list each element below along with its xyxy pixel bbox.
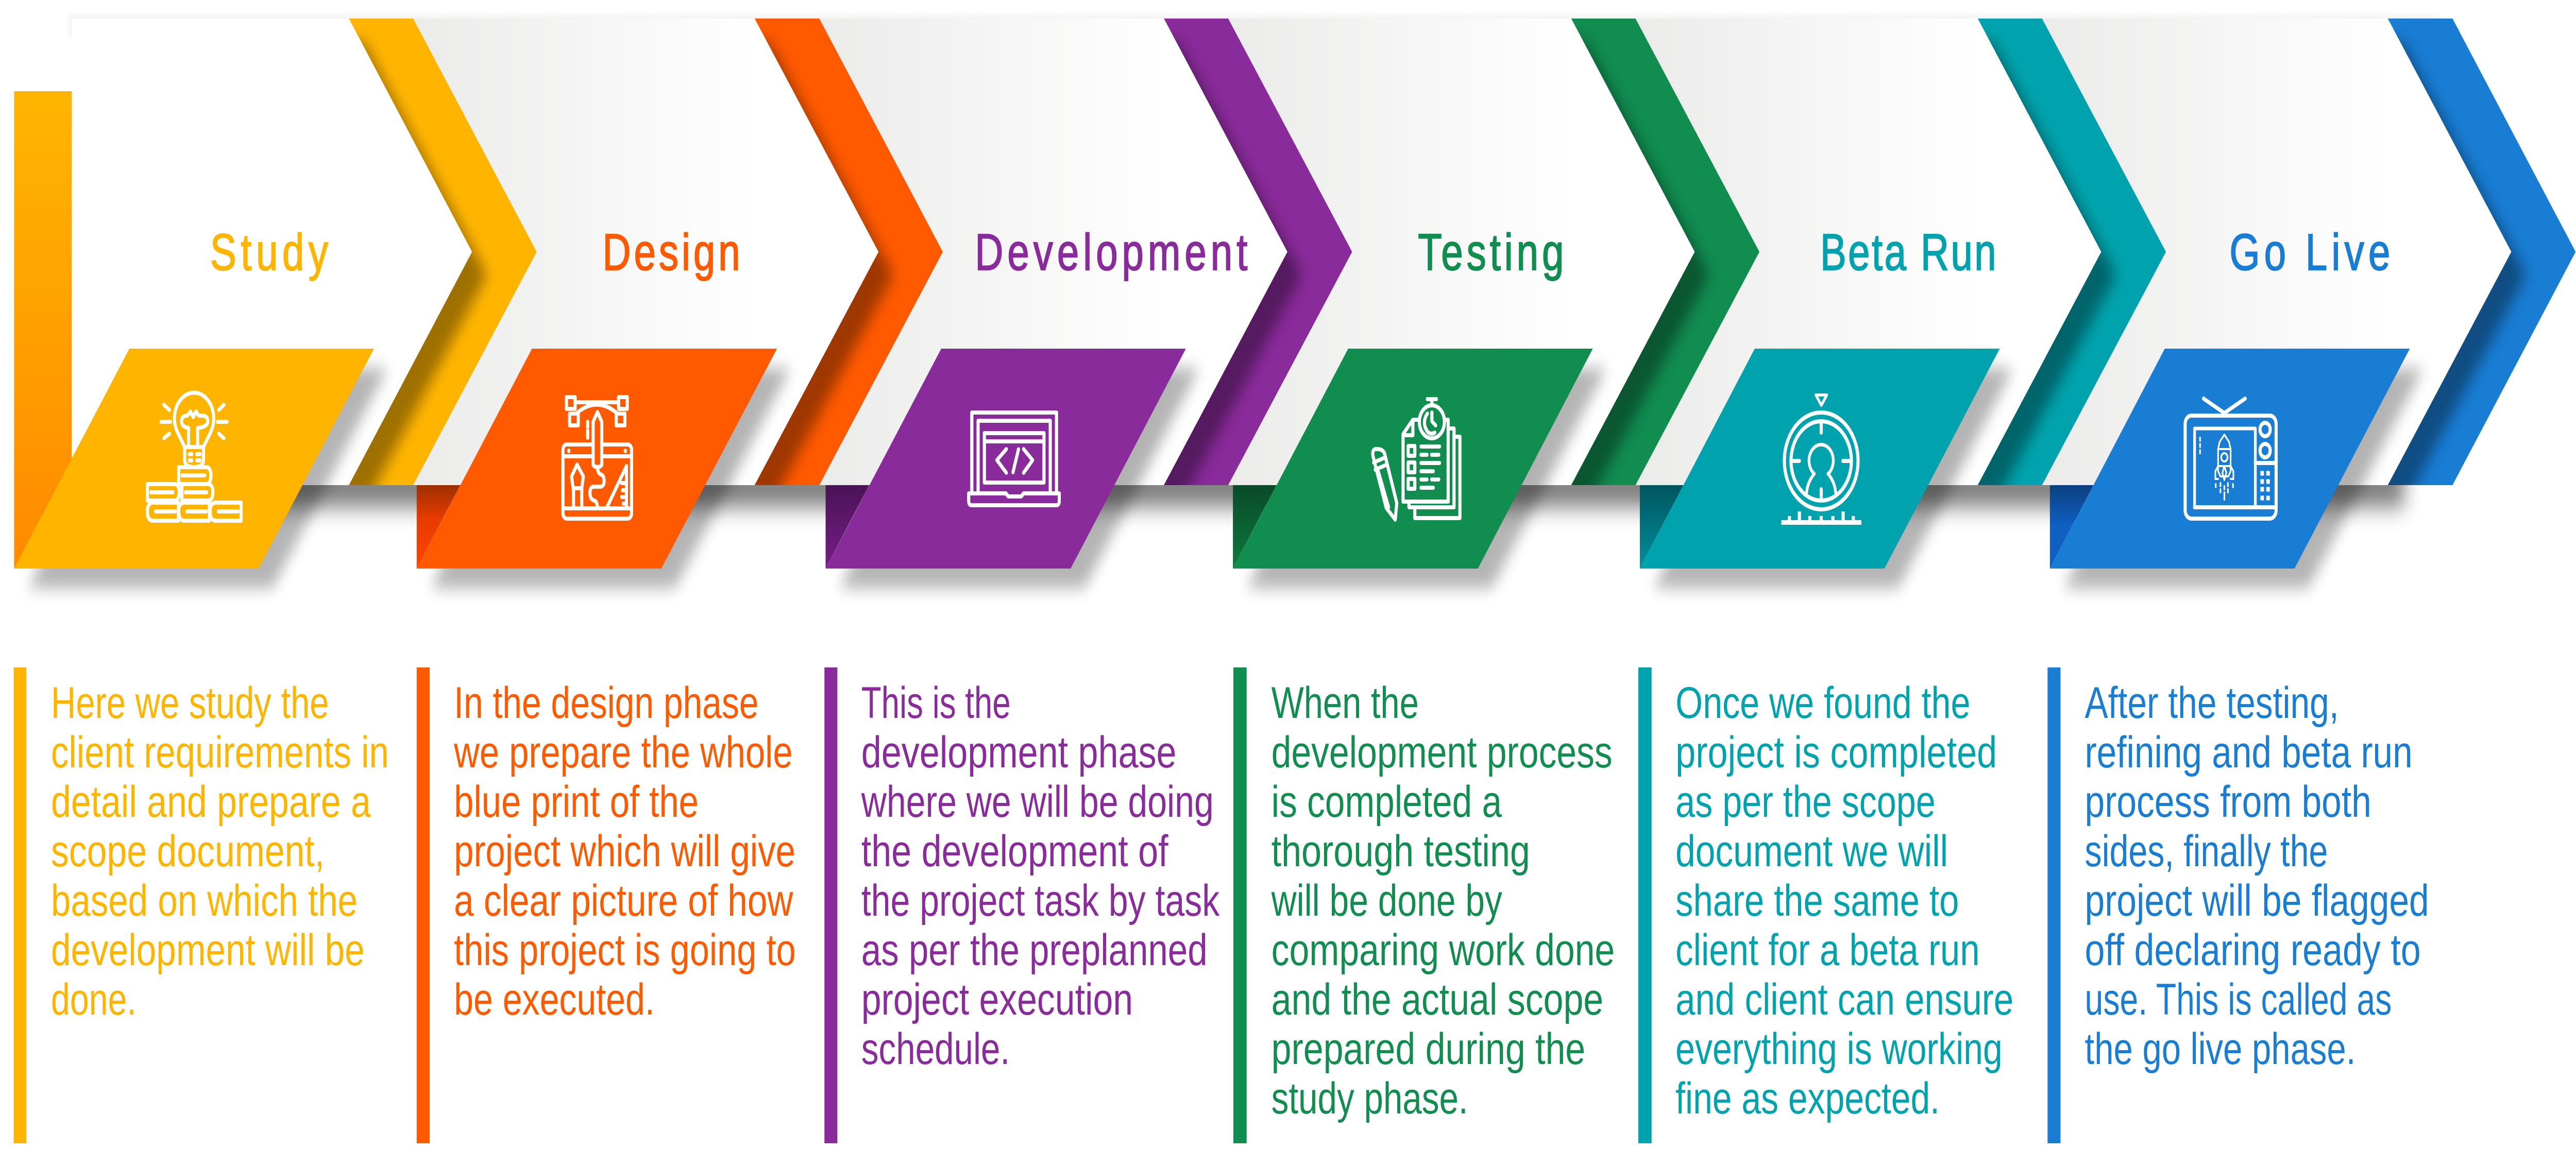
description: Study: Here we study the <box>51 678 329 728</box>
left accent bar <box>14 91 72 569</box>
description: Design: we prepare the whole <box>453 728 793 777</box>
description: Development: This is the <box>861 678 1011 728</box>
icon: design tools <box>563 397 632 519</box>
description: Beta Run: as per the scope <box>1675 777 1936 827</box>
description: Study: based on which the <box>51 876 358 925</box>
chevron: Design <box>413 19 943 508</box>
description: Testing: comparing work done <box>1272 925 1615 975</box>
card: Study <box>14 349 388 588</box>
title: Beta Run: Beta Run <box>1820 224 1996 281</box>
description: Development: development phase <box>861 728 1177 777</box>
chevron: Go Live <box>2042 19 2575 508</box>
description: Design: this project is going to <box>454 925 796 975</box>
description: Study: detail and prepare a <box>51 777 371 827</box>
chevron: Beta Run <box>1636 19 2166 508</box>
description: Development: where we will be doing <box>861 777 1214 827</box>
description: Beta Run: fine as expected. <box>1675 1074 1940 1123</box>
chevron row <box>72 19 2575 508</box>
description: Go Live: sides, finally the <box>2085 827 2328 876</box>
description: Beta Run <box>1638 667 2013 1143</box>
description: Design: be executed. <box>454 975 655 1024</box>
chevron: Testing <box>1228 19 1759 508</box>
description: Design <box>417 667 796 1143</box>
description: Beta Run: client for a beta run <box>1675 925 1980 975</box>
description: Development <box>824 667 1220 1143</box>
icon: checklist with stopwatch and pencil <box>1373 399 1460 520</box>
description: Design: project which will give <box>454 827 795 876</box>
description: Testing <box>1233 667 1615 1143</box>
description: Go Live: project will be flagged <box>2085 876 2429 925</box>
description: Testing: thorough testing <box>1272 827 1530 876</box>
description: Testing: prepared during the <box>1272 1024 1585 1074</box>
icon: laptop with code <box>969 413 1059 505</box>
description: Testing: is completed a <box>1272 777 1502 827</box>
description: Beta Run: share the same to <box>1675 876 1959 925</box>
description: Beta Run: Once we found the <box>1675 678 1970 728</box>
title: Design: Design <box>603 224 740 281</box>
description: Go Live: off declaring ready to <box>2085 925 2421 975</box>
card: Development <box>825 349 1199 588</box>
description: Beta Run: everything is working <box>1675 1024 2003 1074</box>
icon: light bulb on books <box>147 392 241 521</box>
description: Development: the development of <box>861 827 1168 876</box>
title: Testing: Testing <box>1418 224 1564 281</box>
description: Testing: and the actual scope <box>1272 975 1603 1024</box>
card: Beta Run <box>1640 349 2013 588</box>
description: Testing: study phase. <box>1272 1074 1468 1123</box>
card: Go Live <box>2050 349 2424 588</box>
description: Development: as per the preplanned <box>861 925 1208 975</box>
title: Development: Development <box>975 224 1248 281</box>
description: Beta Run: and client can ensure <box>1675 975 2013 1024</box>
description: Go Live: use. This is called as <box>2085 975 2392 1024</box>
description: Study: scope document, <box>51 827 325 876</box>
card: Testing <box>1233 349 1606 588</box>
description: Study <box>14 667 389 1143</box>
description: Testing: When the <box>1272 678 1419 728</box>
description: Study: done. <box>51 975 137 1024</box>
description: Go Live <box>2047 667 2429 1143</box>
icon: compass dial <box>1782 395 1861 525</box>
description: Beta Run: project is completed <box>1675 728 1997 777</box>
description: Go Live: refining and beta run <box>2085 728 2413 777</box>
description: Development: project execution <box>861 975 1133 1024</box>
card: Design <box>417 349 791 588</box>
description: Go Live: After the testing, <box>2085 678 2339 728</box>
title: Study: Study <box>210 224 328 281</box>
description: Testing: will be done by <box>1271 876 1503 925</box>
chevron: Development <box>819 19 1352 508</box>
title: Go Live: Go Live <box>2229 224 2390 281</box>
description: Go Live: the go live phase. <box>2085 1024 2355 1074</box>
description: Beta Run: document we will <box>1675 827 1948 876</box>
chevron: Study <box>72 19 537 508</box>
description: Design: In the design phase <box>454 678 758 728</box>
description: Development: schedule. <box>861 1024 1010 1074</box>
description: Design: a clear picture of how <box>454 876 793 925</box>
icon: TV with rocket <box>2185 399 2276 519</box>
description: Design: blue print of the <box>454 777 699 827</box>
description: Study: client requirements in <box>51 728 389 777</box>
description: Development: the project task by task <box>861 876 1220 925</box>
description: Study: development will be <box>51 925 365 975</box>
description: Testing: development process <box>1272 728 1613 777</box>
description: Go Live: process from both <box>2085 777 2371 827</box>
